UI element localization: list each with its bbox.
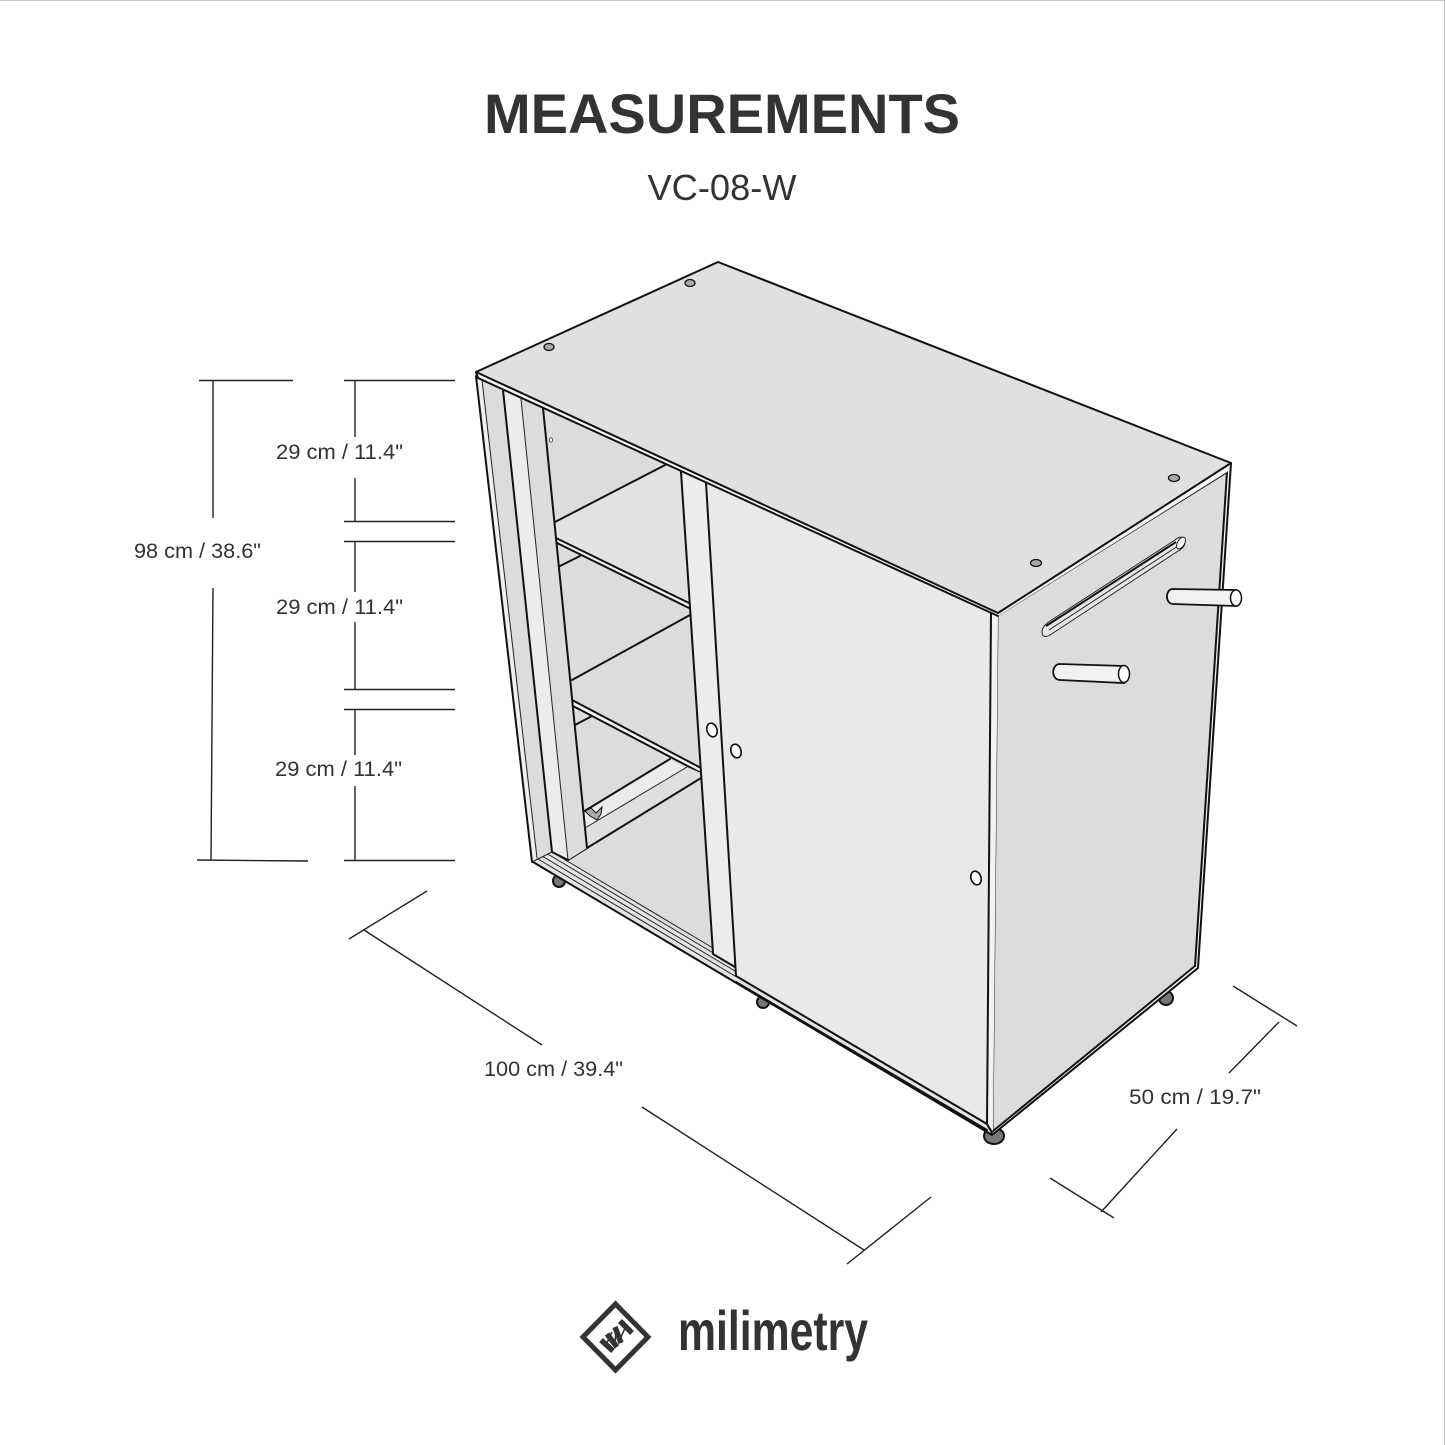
dimension: depth 50 cm (1050, 986, 1297, 1218)
cabinet illustration (476, 262, 1242, 1144)
dimension: middle compartment 29 cm: 29 cm / 11.4" (276, 596, 403, 619)
dimension: depth 50 cm: 50 cm / 19.7" (1129, 1086, 1261, 1109)
dimension: total height 98 cm (134, 380, 308, 861)
right side panel (992, 463, 1242, 1135)
peg upper (1167, 589, 1242, 606)
handle slot (1042, 536, 1187, 636)
icon: diamond mark (583, 1304, 648, 1370)
top panel (476, 262, 1231, 616)
dimension: width 100 cm: 100 cm / 39.4" (484, 1058, 623, 1081)
dimension: total height 98 cm: 98 cm / 38.6" (134, 540, 261, 563)
logo: milimetry (583, 1299, 868, 1370)
bottom rail (533, 852, 992, 1135)
wing nut (585, 807, 602, 820)
rear cross brace (583, 759, 701, 848)
upper shelf (555, 464, 689, 608)
dimension: lower compartment 29 cm (275, 709, 455, 860)
dimension: width 100 cm (349, 891, 931, 1264)
peg lower (1053, 664, 1130, 683)
open compartment with shelves (543, 408, 713, 953)
left frame panels (476, 376, 587, 862)
sliding door (681, 472, 998, 1133)
door finger holes (705, 722, 983, 886)
dimension: middle compartment 29 cm (276, 541, 455, 690)
screw mark (549, 438, 553, 442)
dimension: upper compartment 29 cm (276, 380, 455, 522)
lower shelf (572, 615, 701, 773)
subtitle: model code: VC-08-W (648, 167, 797, 208)
casters (553, 875, 1173, 1144)
top screw holes (544, 280, 1180, 566)
title: MEASUREMENTS (484, 82, 960, 145)
dimension: lower compartment 29 cm: 29 cm / 11.4" (275, 758, 402, 781)
wordmark: milimetry (678, 1299, 868, 1362)
dimension: upper compartment 29 cm: 29 cm / 11.4" (276, 441, 403, 464)
